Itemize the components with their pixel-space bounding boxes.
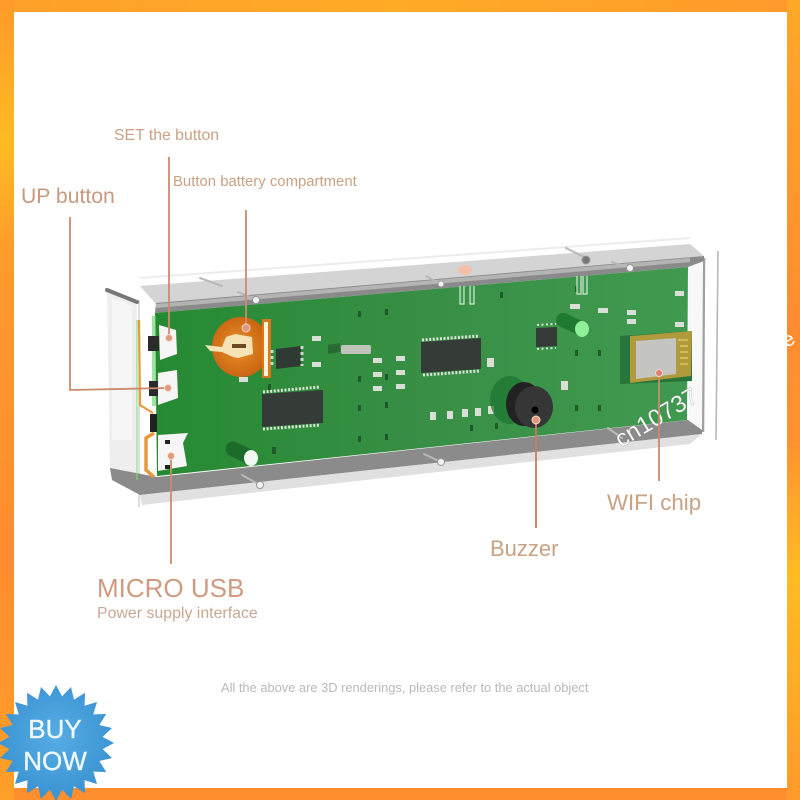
product: acrylic clock enclosure with circuit board — [107, 238, 718, 507]
board vias — [268, 286, 601, 454]
label: SET the button: SET the button — [114, 127, 219, 144]
bottom grey rail — [110, 420, 702, 505]
WIFI module — [620, 331, 692, 384]
top grey rail — [107, 244, 704, 313]
label: Power supply interface: Power supply interface — [97, 605, 258, 622]
leader line: buzzer — [532, 416, 540, 528]
button battery holder — [205, 317, 271, 378]
translucent LED legs on top edge — [458, 265, 587, 304]
large chip left — [262, 387, 323, 429]
label: MICRO USB: MICRO USB — [97, 573, 244, 603]
capacitor near USB — [233, 449, 258, 466]
surface mount parts — [239, 291, 684, 420]
buzzer — [490, 376, 553, 428]
leader line: micro USB — [168, 452, 174, 564]
small chip right — [536, 324, 557, 349]
leader line: SET button — [166, 157, 172, 342]
starburst — [0, 685, 114, 800]
green circuit board — [155, 267, 688, 476]
SET button — [148, 325, 177, 360]
green capacitor right — [563, 320, 589, 337]
label: Button battery compartment: Button battery compartment — [173, 174, 358, 190]
acrylic case back and left panel — [107, 238, 718, 507]
large chip centre — [421, 336, 481, 375]
footnote: All the above are 3D renderings, please refer to the actual object — [221, 680, 589, 695]
leader line: UP button — [70, 217, 172, 392]
acrylic fastening pins — [200, 248, 634, 488]
badge text: NOW: NOW — [23, 746, 87, 776]
watermark: right continuation on border: e — [778, 328, 799, 352]
label: UP button: UP button — [21, 185, 115, 208]
crystal oscillator — [328, 343, 371, 354]
badge: BUY NOW — [0, 685, 114, 800]
leader line: battery compartment — [242, 210, 250, 332]
UP button — [149, 370, 178, 405]
micro USB socket — [150, 414, 188, 471]
label: Buzzer: Buzzer — [490, 536, 558, 561]
left edge orange flex and sensor strip — [137, 316, 156, 480]
leader line: WIFI chip — [656, 370, 662, 481]
watermark: store id over product: cn10737 — [610, 383, 703, 453]
label: WIFI chip: WIFI chip — [607, 490, 701, 515]
badge text: BUY: BUY — [28, 714, 82, 744]
small 8-pin chip — [272, 346, 302, 369]
